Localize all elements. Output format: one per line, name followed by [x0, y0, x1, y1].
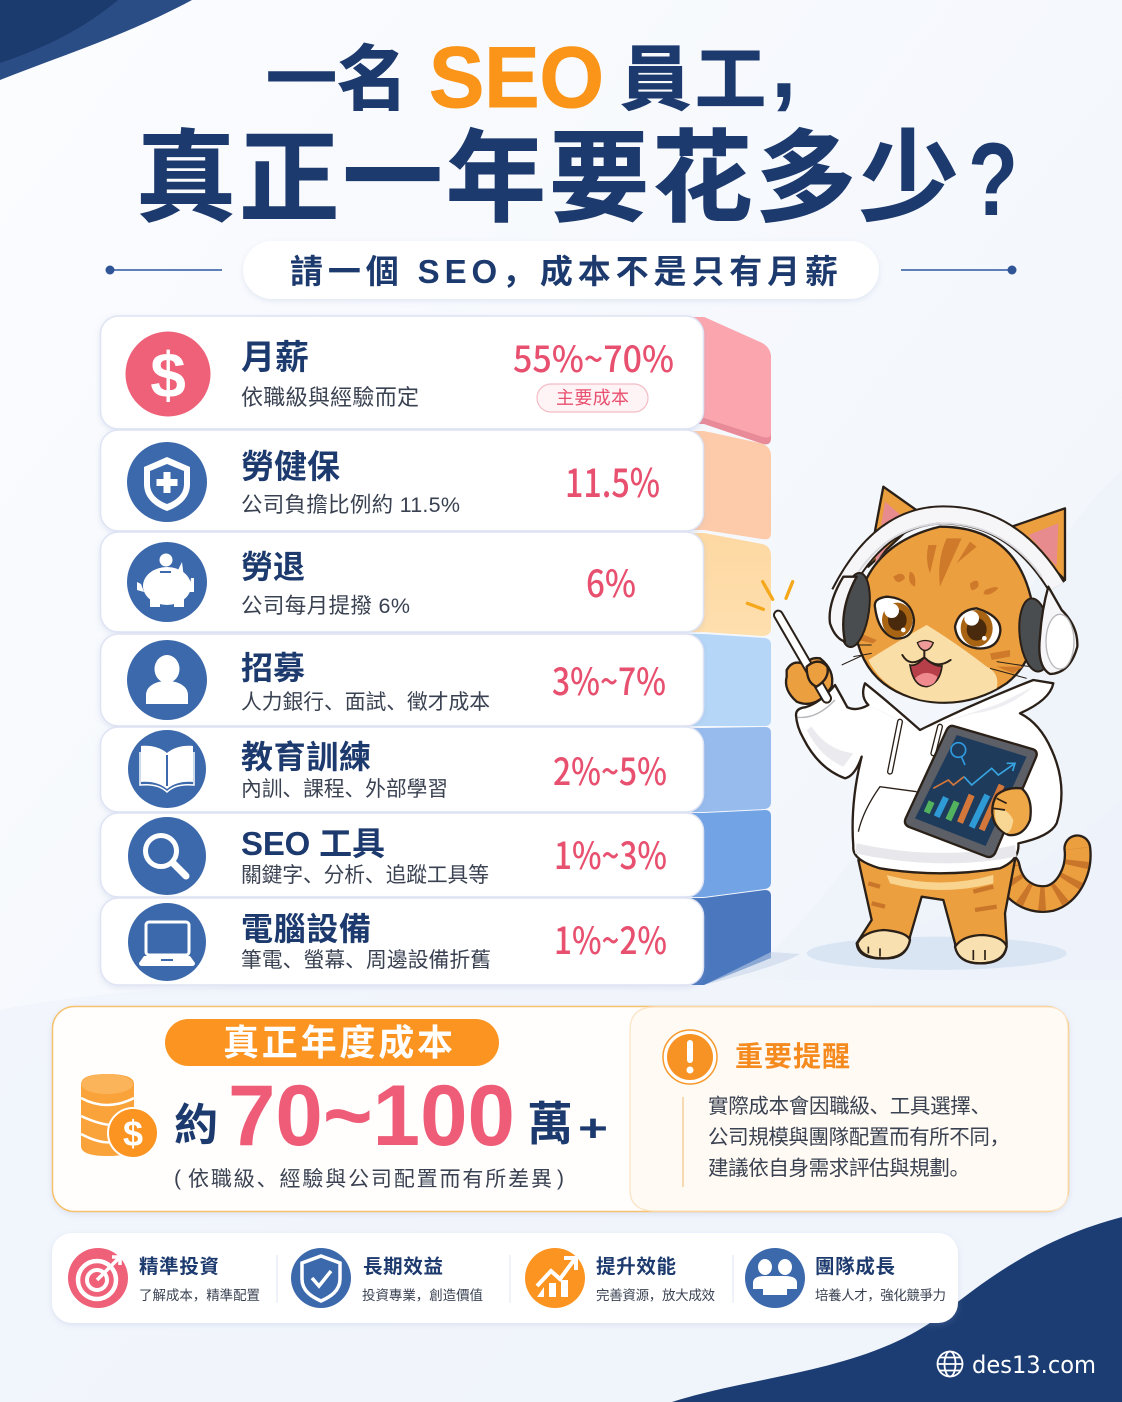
panel: reminder: [630, 1007, 1068, 1211]
pill heading: 真正年度成本: [223, 1022, 453, 1063]
ears: [868, 487, 1065, 580]
benefit: 精準投資: [68, 1248, 260, 1308]
subtitle pill: 請一個 SEO，成本不是只有月薪: [290, 253, 838, 290]
paw holding tablet: [992, 788, 1031, 835]
icon: shield: [127, 442, 207, 522]
row: 月薪: 月薪: [241, 339, 309, 377]
benefits strip: [52, 1233, 958, 1323]
row: 電腦設備: 電腦設備: [241, 911, 371, 947]
title: 一名: [266, 41, 408, 120]
benefit: 團隊成長: [745, 1248, 946, 1308]
benefit: 精準投資: 了解成本，精準配置: [139, 1288, 260, 1303]
icon: coins: [81, 1074, 158, 1158]
title: SEO: [429, 30, 604, 126]
row: 教育訓練: [100, 727, 704, 812]
panel: reminder: 重要提醒: [735, 1041, 850, 1072]
benefit: 長期效益: [291, 1248, 483, 1308]
icon: piggy bank: [127, 542, 207, 622]
legs: [857, 860, 1015, 963]
row: 招募: 招募: [241, 650, 305, 686]
row: 電腦設備: 筆電、螢幕、周邊設備折舊: [241, 949, 491, 972]
hoodie: [796, 680, 1061, 873]
panel: reminder: 建議依自身需求評估與規劃。: [708, 1157, 970, 1180]
cost note: ): [557, 1167, 564, 1190]
corner: top-left navy: [0, 0, 192, 80]
row: 勞退: [100, 532, 704, 632]
row: 勞健保: [100, 430, 704, 531]
benefit: 提升效能: 提升效能: [596, 1256, 676, 1278]
row: SEO 工具: [100, 813, 704, 897]
total cost panel: 萬: [527, 1098, 573, 1150]
icon: dollar: [126, 332, 210, 416]
icon: dollar: $: [150, 339, 186, 411]
row: 教育訓練: 內訓、課程、外部學習: [241, 778, 448, 801]
tail: [1007, 848, 1078, 899]
stacked 3D side bar: [690, 317, 800, 985]
title: 真正一年要花多少: [136, 123, 959, 235]
benefit: 提升效能: [525, 1248, 716, 1308]
row: 勞退: 6%: [586, 554, 636, 608]
title: ,: [771, 15, 797, 117]
total cost panel: 70~100: [228, 1068, 515, 1164]
row: 招募: 人力銀行、面試、徵才成本: [241, 691, 490, 714]
cost note: 依職級、經驗與公司配置而有所差異: [188, 1168, 552, 1191]
row: 月薪: [100, 316, 704, 429]
row: 教育訓練: 2%~5%: [553, 742, 667, 796]
benefit: 團隊成長: 培養人才，強化競爭力: [815, 1287, 946, 1303]
title: ?: [968, 122, 1018, 238]
benefit: 精準投資: 精準投資: [139, 1256, 219, 1278]
total cost panel: 約: [174, 1101, 218, 1150]
title: [136, 15, 1018, 238]
row: SEO 工具: 關鍵字、分析、追蹤工具等: [241, 864, 489, 887]
corner: bottom-right navy: [672, 1217, 1122, 1402]
benefit: 長期效益: 投資專業，創造價值: [362, 1288, 483, 1303]
icon: person: [127, 640, 207, 720]
row: 勞退: 勞退: [241, 549, 305, 585]
website logo: des13.com: [972, 1351, 1096, 1379]
row: 招募: [100, 634, 704, 726]
tag: 主要成本: [537, 384, 648, 412]
tag: 主要成本: 主要成本: [556, 388, 629, 408]
icon: magnifier: [128, 817, 206, 895]
subtitle pill: [106, 241, 1016, 299]
sparks: [747, 582, 793, 609]
benefit: 提升效能: 完善資源，放大成效: [596, 1288, 716, 1303]
panel: reminder: 實際成本會因職級、工具選擇、: [708, 1095, 991, 1118]
paw with stylus: [778, 615, 832, 704]
icon: coins: $: [123, 1113, 143, 1154]
pill heading: [165, 1019, 499, 1066]
icon: book: [128, 730, 206, 808]
row: 月薪: 依職級與經驗而定: [241, 385, 419, 410]
panel: reminder: 公司規模與團隊配置而有所不同，: [708, 1126, 1010, 1149]
row: SEO 工具: 1%~3%: [554, 826, 667, 880]
title: 員工: [620, 41, 766, 120]
row: SEO 工具: SEO 工具: [241, 825, 385, 862]
total cost panel: +: [578, 1108, 608, 1150]
benefit: 團隊成長: 團隊成長: [815, 1255, 895, 1278]
benefit: 長期效益: 長期效益: [363, 1256, 443, 1278]
row: 招募: 3%~7%: [552, 652, 666, 706]
row: 電腦設備: 1%~2%: [554, 911, 667, 965]
row: 勞健保: 勞健保: [241, 448, 340, 485]
total cost panel: [52, 1006, 1068, 1212]
row: 電腦設備: [100, 898, 704, 985]
head: [842, 527, 1034, 703]
row: 教育訓練: 教育訓練: [241, 739, 371, 775]
icon: laptop: [128, 903, 206, 981]
tablet: [905, 726, 1037, 857]
row: 勞健保: 公司負擔比例約 11.5%: [241, 493, 460, 517]
icon: exclamation: [663, 1030, 717, 1084]
cat mascot illustration: [747, 487, 1078, 970]
row: 勞健保: 11.5%: [565, 453, 660, 509]
row: 月薪: 55%~70%: [513, 331, 674, 383]
cost note: (: [174, 1167, 181, 1190]
row: 勞退: 公司每月提撥 6%: [241, 594, 410, 618]
headphones: [830, 515, 1077, 674]
